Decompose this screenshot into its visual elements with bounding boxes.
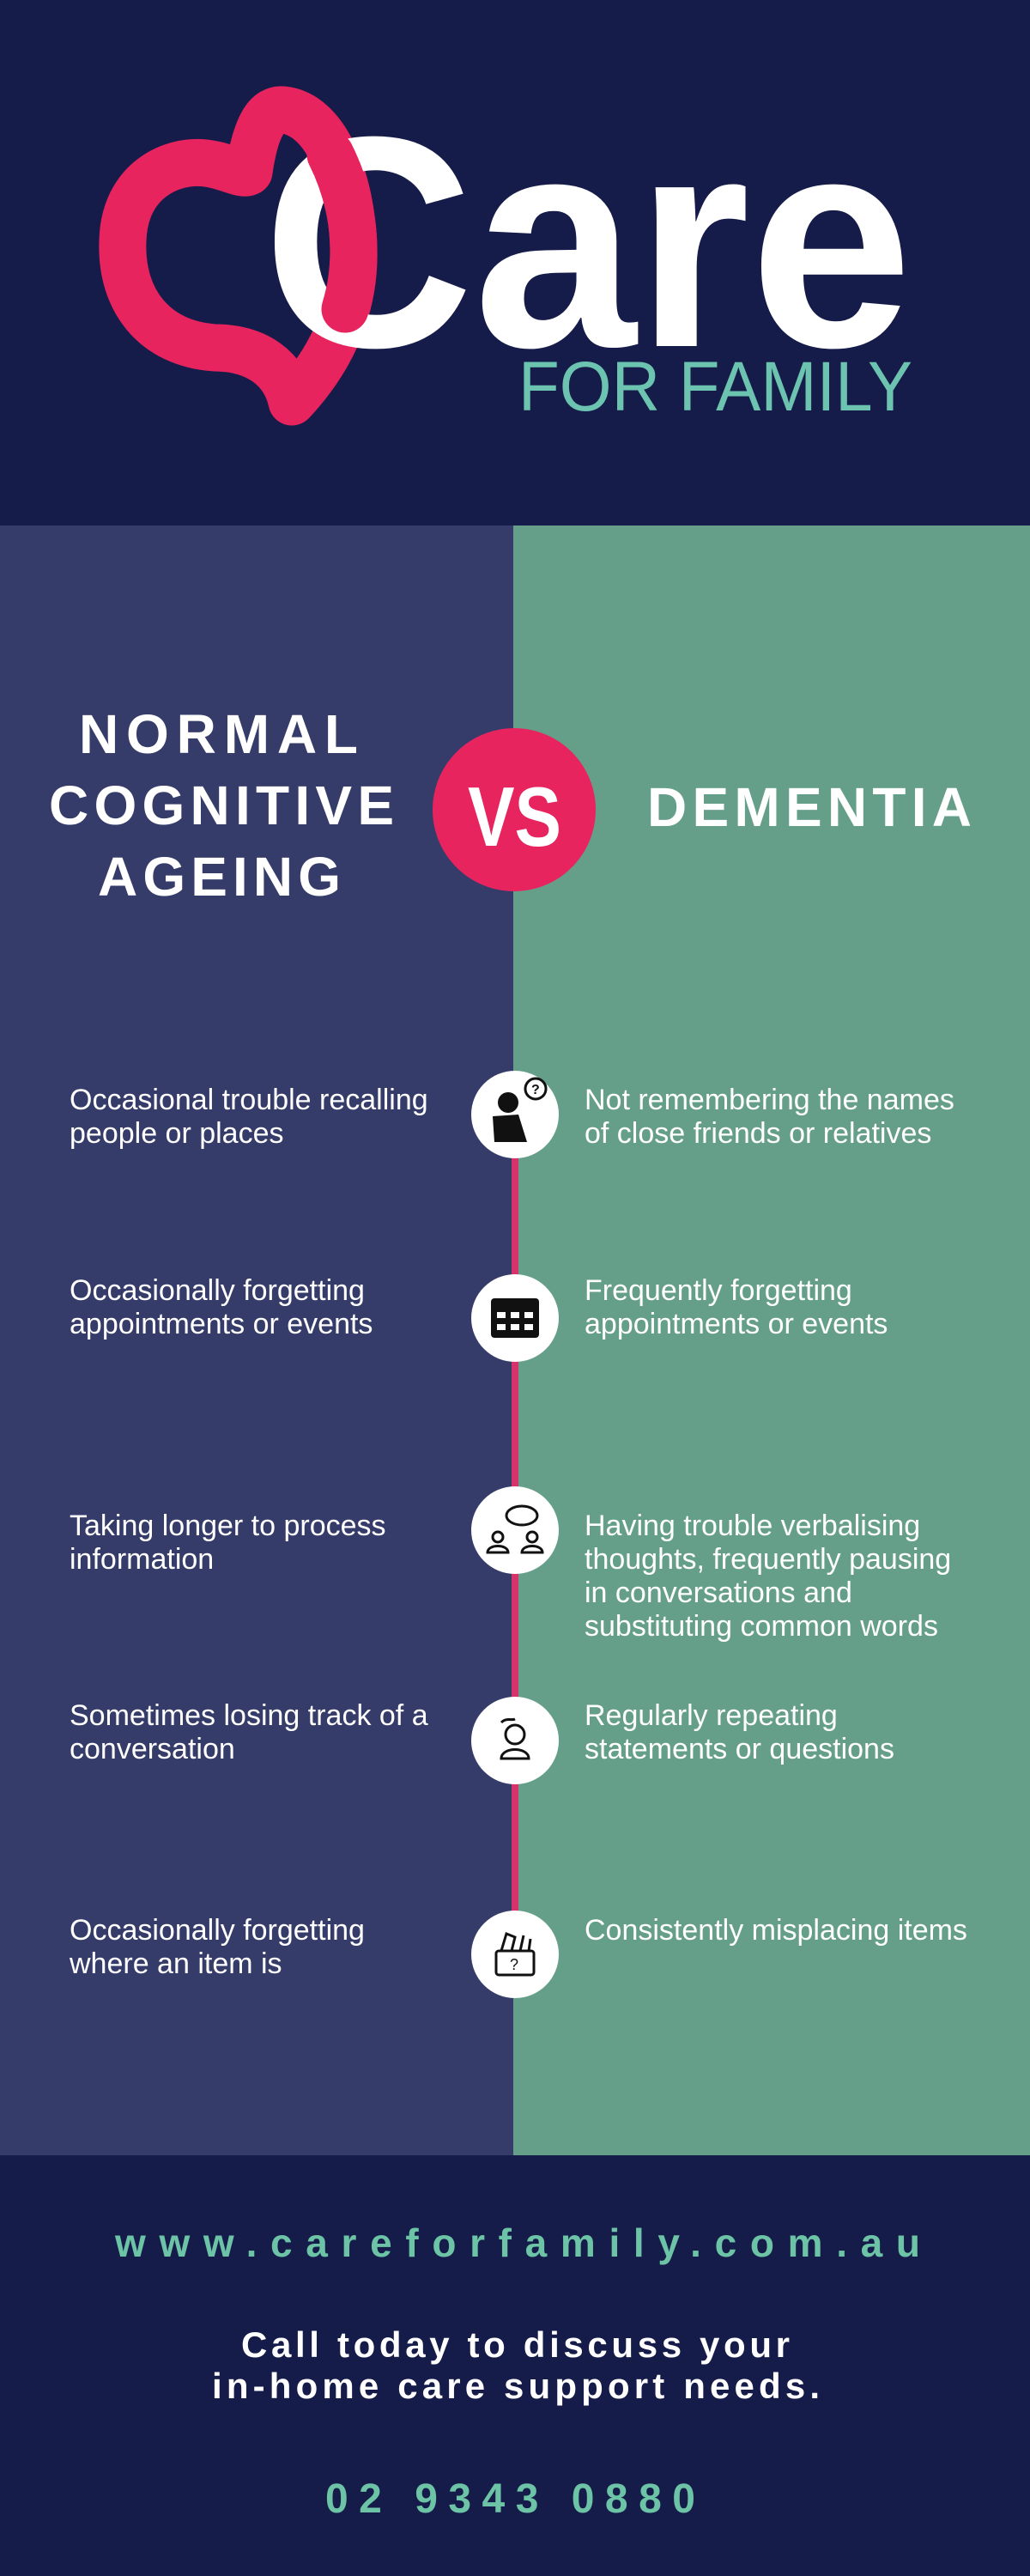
- right text 1: of close friends or relatives: [585, 1117, 931, 1150]
- icon: calendar: [471, 1274, 559, 1362]
- icon: stressed person: [471, 1697, 559, 1784]
- right text 4: Regularly repeating: [585, 1699, 838, 1732]
- left text 5: where an item is: [69, 1947, 282, 1980]
- footer background: [0, 2155, 1030, 2576]
- right text 3: in conversations and: [585, 1577, 852, 1609]
- icon: box with question: ?: [510, 1956, 518, 1973]
- right text 2: Frequently forgetting: [585, 1274, 852, 1307]
- icon: confused person: ?: [531, 1083, 540, 1097]
- heading: normal cognitive ageing: [49, 703, 394, 908]
- right text 3: Having trouble verbalising: [585, 1510, 920, 1542]
- right text 1: Not remembering the names: [585, 1084, 954, 1116]
- right text 3: substituting common words: [585, 1610, 938, 1643]
- logo heart overlap: [330, 155, 354, 309]
- footer call to action: in-home care support needs.: [212, 2366, 820, 2406]
- logo heart: [123, 110, 354, 402]
- left text 1: people or places: [70, 1117, 284, 1150]
- left text 4: Sometimes losing track of a: [70, 1699, 428, 1732]
- timeline line: [512, 1116, 518, 1954]
- left text 2: appointments or events: [70, 1308, 373, 1340]
- icon: conversation: [471, 1486, 559, 1574]
- left text 1: Occasional trouble recalling: [70, 1084, 428, 1116]
- heading: dementia: DEMENTIA: [647, 776, 972, 838]
- right text 3: thoughts, frequently pausing: [585, 1543, 951, 1576]
- icon: box with question: [471, 1911, 559, 1998]
- footer phone: 02 9343 0880: [325, 2476, 695, 2522]
- right text 5: Consistently misplacing items: [585, 1914, 967, 1947]
- logo word Care: Care: [263, 75, 912, 410]
- heading: normal cognitive ageing: NORMAL: [79, 703, 358, 765]
- heading: normal cognitive ageing: COGNITIVE: [49, 775, 394, 836]
- header background: [0, 0, 1030, 526]
- vs badge: VS: [468, 769, 561, 864]
- logo: [123, 75, 912, 426]
- panel: dementia background: [513, 526, 1030, 2155]
- footer call to action: [212, 2324, 820, 2406]
- logo tagline: FOR FAMILY: [518, 348, 912, 426]
- right text 4: statements or questions: [585, 1733, 894, 1765]
- heading: normal cognitive ageing: AGEING: [98, 846, 341, 908]
- left text 5: Occasionally forgetting: [70, 1914, 365, 1947]
- left text 3: information: [70, 1543, 214, 1576]
- footer call to action: Call today to discuss your: [241, 2324, 790, 2365]
- footer website: www.careforfamily.com.au: [114, 2221, 920, 2265]
- left text 2: Occasionally forgetting: [70, 1274, 365, 1307]
- comparison rows: [69, 1084, 967, 1980]
- icon: confused person: [471, 1071, 559, 1158]
- left text 3: Taking longer to process: [70, 1510, 386, 1542]
- left text 4: conversation: [70, 1733, 235, 1765]
- vs badge: [433, 728, 596, 891]
- panel: normal ageing background: [0, 526, 513, 2155]
- right text 2: appointments or events: [585, 1308, 888, 1340]
